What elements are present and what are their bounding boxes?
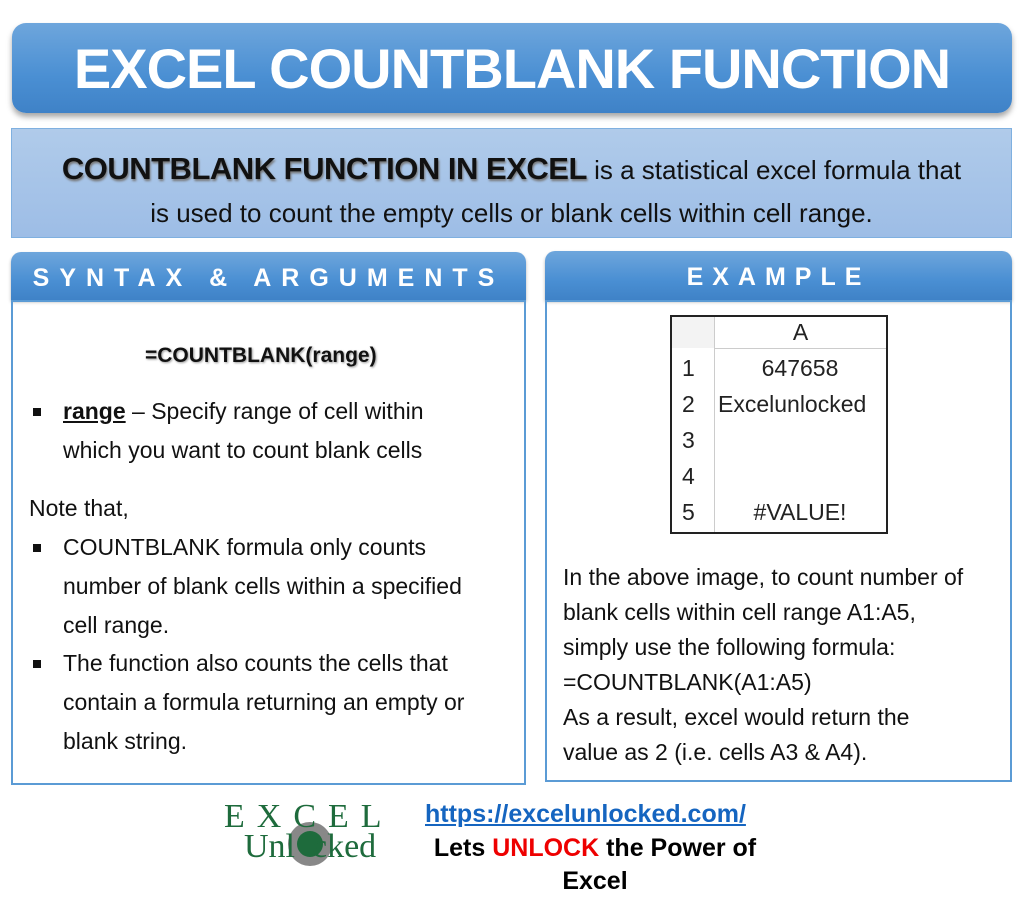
title bar: EXCEL COUNTBLANK FUNCTION — [74, 37, 950, 100]
header: example: EXAMPLE — [687, 263, 870, 291]
example explanation: blank cells within cell range A1:A5, — [563, 599, 916, 625]
tagline: Lets UNLOCK the Power of — [434, 834, 756, 862]
logo: Unlocked — [244, 828, 376, 865]
header: syntax & arguments — [11, 252, 526, 300]
title bar — [12, 23, 1012, 113]
definition box: is used to count the empty cells or blank cells within cell range. — [150, 198, 873, 228]
website link: https://excelunlocked.com/ — [425, 800, 746, 828]
example explanation: In the above image, to count number of — [563, 564, 963, 590]
header: syntax & arguments: SYNTAX & ARGUMENTS — [33, 264, 504, 292]
note bullets: blank string. — [63, 728, 187, 754]
spreadsheet table: 647658 — [762, 355, 838, 381]
note bullets: contain a formula returning an empty or — [63, 689, 464, 715]
spreadsheet table: 1 — [682, 355, 695, 381]
example explanation: As a result, excel would return the — [563, 704, 909, 730]
panel: syntax body — [11, 300, 526, 785]
note bullets: COUNTBLANK formula only counts — [63, 534, 426, 560]
spreadsheet table: A — [793, 319, 808, 345]
header: example — [545, 251, 1012, 300]
logo — [224, 798, 394, 866]
argument bullet — [33, 398, 424, 463]
panel: example body — [545, 300, 1012, 782]
spreadsheet table: Excelunlocked — [718, 391, 866, 417]
example explanation — [563, 564, 964, 765]
definition box: COUNTBLANK FUNCTION IN EXCEL is a statistical excel formula that — [62, 151, 961, 186]
note bullets: cell range. — [63, 612, 169, 638]
definition box — [11, 128, 1012, 238]
tagline: Excel — [562, 867, 628, 895]
spreadsheet table: #VALUE! — [754, 499, 846, 525]
icon: padlock — [288, 822, 332, 866]
argument bullet: which you want to count blank cells — [63, 437, 422, 463]
note bullets: The function also counts the cells that — [63, 650, 448, 676]
spreadsheet table — [670, 315, 888, 534]
argument bullet: range – Specify range of cell within — [63, 398, 424, 424]
spreadsheet table: 4 — [682, 463, 695, 489]
note bullets: number of blank cells within a specified — [63, 573, 462, 599]
logo: EXCEL — [224, 798, 394, 835]
spreadsheet table: 5 — [682, 499, 695, 525]
spreadsheet table: 3 — [682, 427, 695, 453]
example explanation: value as 2 (i.e. cells A3 & A4). — [563, 739, 867, 765]
note bullets — [33, 534, 464, 754]
example explanation: =COUNTBLANK(A1:A5) — [563, 669, 812, 695]
spreadsheet table: 2 — [682, 391, 695, 417]
syntax formula: =COUNTBLANK(range) — [145, 344, 377, 367]
tagline — [434, 834, 756, 895]
note: Note that, — [29, 495, 129, 521]
example explanation: simply use the following formula: — [563, 634, 895, 660]
